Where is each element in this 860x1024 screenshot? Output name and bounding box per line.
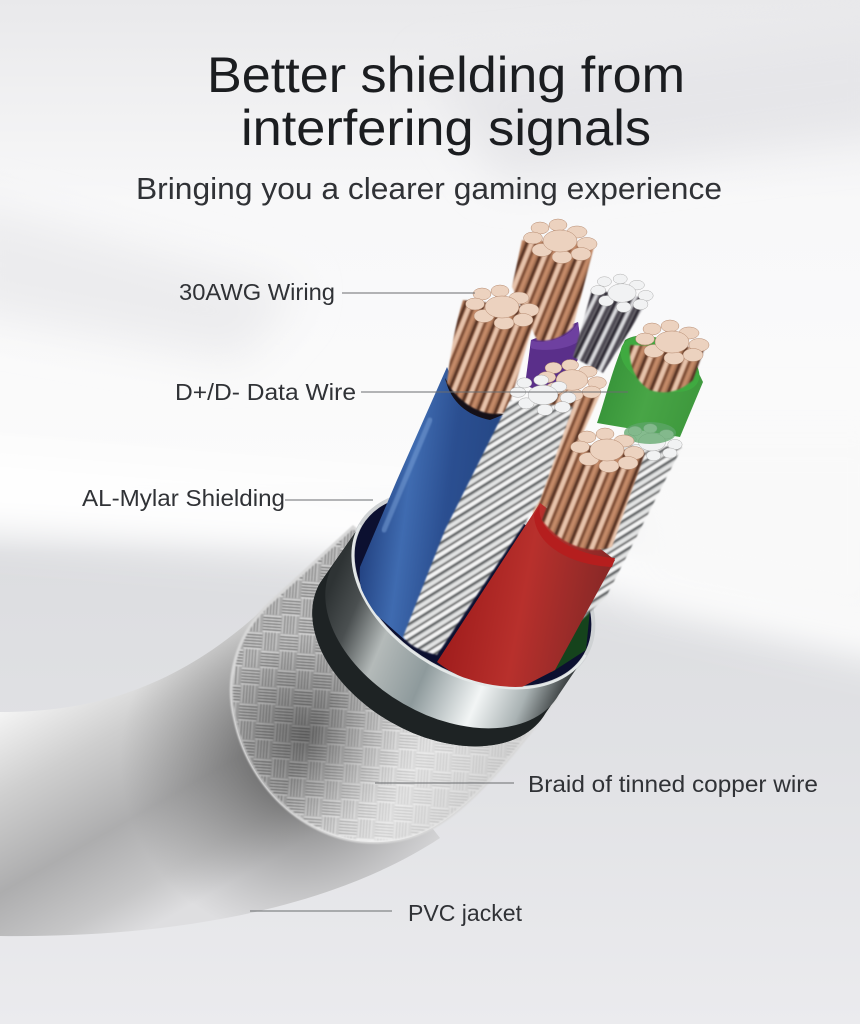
title: Better shielding from [207, 47, 685, 103]
green wire [597, 320, 709, 437]
red wire [437, 503, 615, 688]
label: D+/D- Data Wire: D+/D- Data Wire [175, 379, 356, 405]
title [207, 47, 685, 156]
copper strands: red wire [542, 428, 645, 550]
braid of tinned copper wire [231, 527, 557, 842]
copper strands: back center wire [525, 360, 606, 525]
label: PVC jacket: PVC jacket [408, 900, 523, 926]
copper strands: blue wire [445, 285, 539, 420]
label: 30AWG Wiring: 30AWG Wiring [179, 279, 335, 305]
dark green wire base [540, 610, 590, 672]
label: Braid of tinned copper wire: Braid of tinned copper wire [528, 771, 818, 797]
ring back [312, 492, 593, 746]
subtitle: Bringing you a clearer gaming experience [136, 171, 722, 206]
callout leader lines [250, 293, 628, 911]
label: AL-Mylar Shielding: AL-Mylar Shielding [82, 485, 285, 511]
PVC jacket [0, 610, 440, 936]
metal ring front band [312, 525, 586, 746]
silver strands: back wire [573, 274, 653, 373]
copper strands: purple wire [512, 219, 597, 341]
purple wire [525, 322, 582, 400]
silver right wire [545, 422, 682, 632]
silver front wire [403, 375, 576, 655]
blue wire [360, 367, 507, 640]
title: interfering signals [241, 100, 651, 156]
